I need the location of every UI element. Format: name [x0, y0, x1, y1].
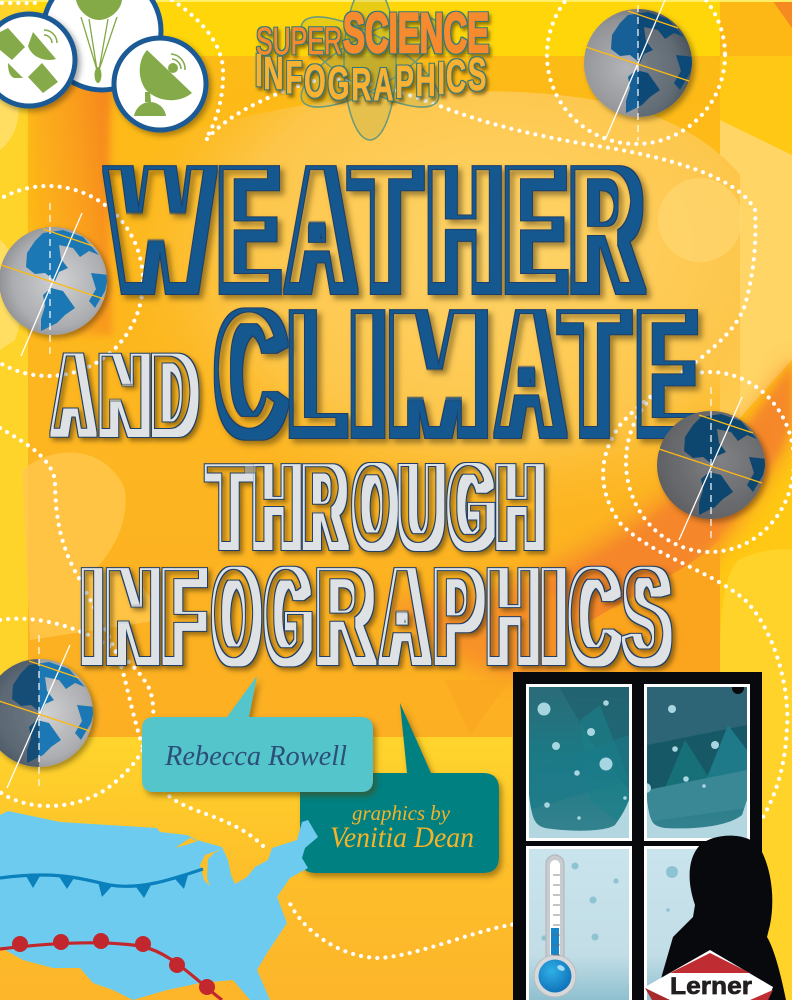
title: INFOGRAPHICS: H [488, 541, 538, 692]
window scene [513, 672, 762, 1000]
title: AND: N [100, 332, 149, 460]
title: CLIMATE: I [350, 274, 386, 475]
title: INFOGRAPHICS: A [382, 541, 428, 692]
title: INFOGRAPHICS: O [215, 541, 259, 692]
icon: satellite [0, 14, 75, 106]
text: E [639, 274, 695, 475]
logo wordmark: SUPER [256, 21, 342, 63]
callout: Rebecca Rowell [142, 676, 373, 792]
icon: parachute [43, 0, 161, 90]
pane: lower left [526, 846, 632, 1000]
globe: left upper [0, 203, 109, 356]
icon: satellite dish [114, 38, 206, 130]
title: CLIMATE: C [218, 274, 284, 475]
great lakes [175, 838, 222, 886]
title: AND: A [54, 332, 93, 460]
title: INFOGRAPHICS: I [540, 541, 566, 692]
US weather map [0, 811, 318, 1000]
snowflakes on lower panes [541, 862, 678, 941]
title: INFOGRAPHICS: C [571, 541, 618, 692]
title: THROUGH: R [304, 441, 345, 574]
title: THROUGH: U [400, 441, 443, 574]
pane: upper left [526, 684, 632, 841]
silhouette of person [656, 836, 786, 1000]
title: WEATHER: A [289, 130, 353, 331]
map silhouette [0, 811, 318, 1000]
logo wordmark: INFOGRAPHICS [255, 46, 486, 111]
title: THROUGH: H [254, 441, 300, 574]
title: WEATHER: T [353, 130, 418, 331]
thermometer [534, 855, 576, 997]
title: THROUGH: T [209, 441, 249, 574]
text: S [625, 541, 669, 692]
title: CLIMATE: A [499, 274, 562, 475]
text: graphics by: graphics by [352, 801, 451, 825]
title: INFOGRAPHICS: P [435, 541, 482, 692]
title: CLIMATE: L [291, 274, 343, 475]
logo wordmark [255, 1, 489, 111]
text: author name: Rebecca Rowell [164, 740, 347, 772]
title: AND: D [153, 332, 196, 460]
globe: lower left [0, 635, 95, 788]
logo wordmark: SCIENCE [343, 1, 489, 64]
atom emblem [289, 0, 451, 140]
title: WEATHER: H [429, 130, 500, 331]
warm front [0, 933, 222, 1000]
pane: lower right [644, 846, 750, 1000]
icon group: satellite, parachute, dish [0, 0, 206, 130]
publisher logo: Lerner [645, 950, 773, 1000]
globe: right [657, 387, 767, 540]
title: THROUGH: O [355, 441, 395, 574]
text: Lerner: Lerner [670, 973, 752, 1000]
title: WEATHER: W [110, 130, 210, 331]
title: INFOGRAPHICS: F [163, 541, 204, 692]
callout: graphics by Venitia Dean [300, 703, 499, 873]
pane: upper right [641, 682, 750, 841]
title: CLIMATE: M [389, 274, 488, 475]
text: Venitia Dean: Venitia Dean [330, 821, 474, 854]
title: WEATHER: E [221, 130, 277, 331]
title: INFOGRAPHICS: N [107, 541, 159, 692]
cold front [0, 869, 203, 898]
title: THROUGH: H [497, 441, 543, 574]
title: WEATHER: R [572, 130, 641, 331]
title: INFOGRAPHICS: I [82, 541, 102, 692]
title: INFOGRAPHICS: R [317, 541, 373, 692]
title: INFOGRAPHICS: G [267, 541, 310, 692]
title: THROUGH: G [450, 441, 493, 574]
series logo: Super Science Infographics [255, 0, 489, 140]
title: CLIMATE: T [563, 274, 626, 475]
globe: top right [584, 0, 694, 141]
title: WEATHER: E [507, 130, 564, 331]
